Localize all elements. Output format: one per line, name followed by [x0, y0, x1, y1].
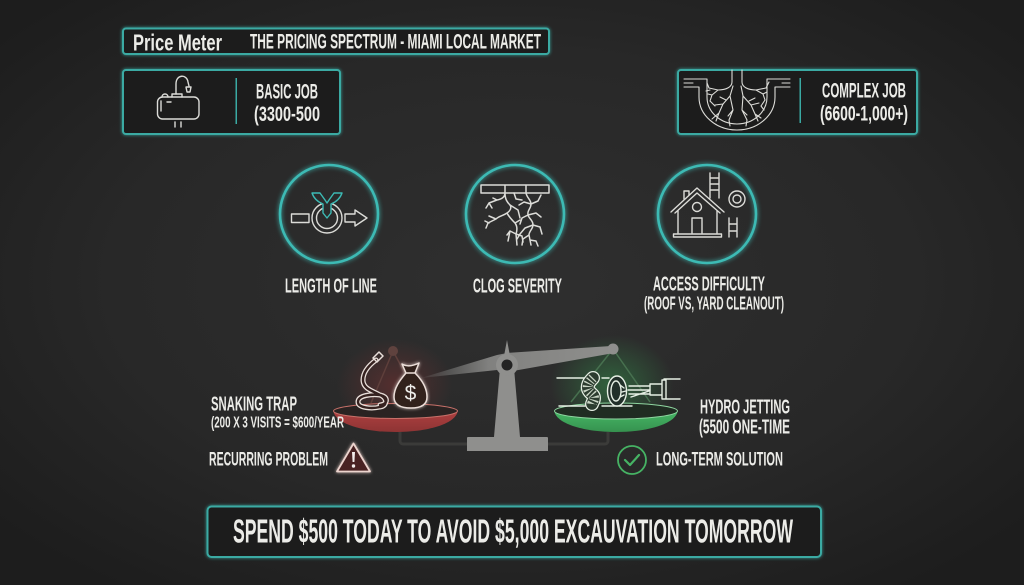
title: Price Meter: Price Meter: [133, 30, 222, 56]
complex job text: COMPLEX JOB: [822, 80, 906, 102]
icon: snake hose: [358, 352, 386, 408]
factor: access difficulty: (ROOF VS, YARD CLEANOUT): [644, 294, 784, 314]
snaking trap text: SNAKING TRAP: [211, 394, 297, 416]
subtitle: THE PRICING SPECTRUM - MIAMI LOCAL MARKET: [250, 30, 541, 54]
icon: green check: [618, 446, 646, 474]
balance scale comparison: (200 X 3 VISITS = $600/YEAR: [211, 414, 344, 432]
recurring problem text: RECURRING PROBLEM: [209, 450, 328, 470]
scale: right pan: [554, 403, 678, 432]
icon: house with ladders: [671, 173, 745, 237]
title bar: [123, 28, 549, 56]
long-term solution text: LONG-TERM SOLUTION: [656, 450, 783, 470]
icon: sink: [158, 76, 199, 127]
panel: basic job: [123, 70, 340, 134]
icon: pipe flow: [292, 193, 367, 233]
icon: money bag: [394, 363, 427, 408]
balance scale comparison: (5500 ONE-TIME: [699, 416, 790, 438]
balance scale comparison: [209, 335, 790, 474]
icon: money bag: $: [405, 382, 417, 405]
label: ACCESS DIFFICULTY: [653, 274, 765, 296]
panel: complex job: (6600-1,000+): [820, 102, 908, 126]
hydro jetting text: HYDRO JETTING: [700, 396, 790, 418]
label: LENGTH OF LINE: [285, 276, 377, 298]
icon: roots: [481, 185, 549, 246]
scale: support lines: [400, 432, 608, 444]
icon: roots in pipe: [684, 70, 790, 130]
factor: length of line: [280, 165, 378, 298]
bottom callout: [208, 506, 821, 557]
icon: warning triangle: [337, 444, 370, 472]
basic job text: BASIC JOB: [256, 80, 318, 104]
panel: basic job: (3300-500: [254, 103, 320, 126]
label: CLOG SEVERITY: [473, 276, 562, 298]
icon: hydro jet pipe: [557, 376, 680, 406]
scale: beam and stand: [421, 340, 618, 451]
scale: left strings: [371, 351, 421, 403]
scale: right strings: [571, 349, 650, 402]
factor: clog severity: [466, 165, 564, 298]
factor: access difficulty: [644, 165, 784, 314]
scale: left pan: [334, 404, 458, 432]
panel: complex job: [678, 70, 917, 134]
